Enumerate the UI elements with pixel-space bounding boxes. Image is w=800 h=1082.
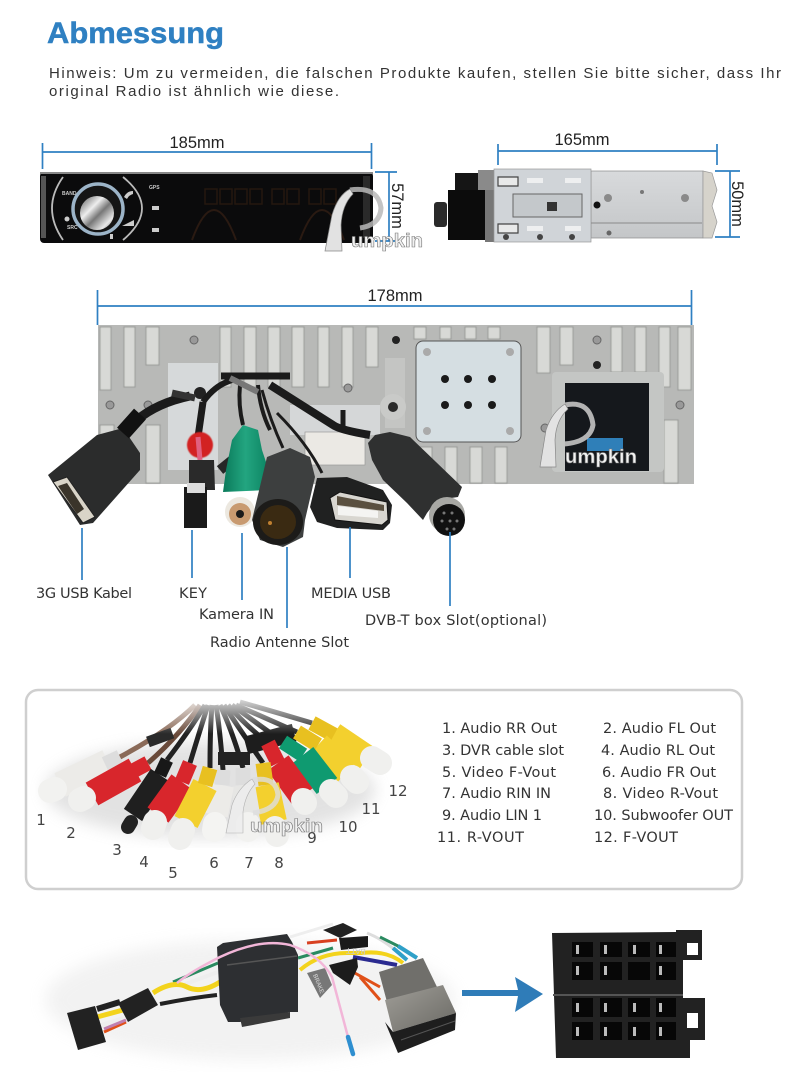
watermark rear: umpkin bbox=[565, 447, 637, 468]
radio front panel bbox=[40, 172, 373, 243]
connector leader lines bbox=[82, 527, 450, 628]
connector labels: Radio Antenne Slot bbox=[210, 635, 349, 651]
RCA plug fan bbox=[45, 692, 380, 838]
connector labels: 3G USB Kabel bbox=[36, 586, 132, 602]
connector: 3G USB bbox=[48, 414, 140, 525]
title: Abmessung bbox=[47, 17, 224, 50]
dimension: 50mm: 50mm bbox=[728, 181, 746, 227]
connector: green RCA (Kamera IN) bbox=[223, 425, 268, 527]
plug legend: 7. Audio RIN IN bbox=[442, 786, 551, 802]
plug 7 bbox=[243, 768, 248, 830]
dimension: 165mm: 165mm bbox=[554, 131, 610, 149]
connector labels bbox=[36, 586, 547, 651]
square mounting plate bbox=[416, 341, 521, 442]
plug 12 bbox=[312, 723, 380, 763]
plug 10 bbox=[283, 742, 336, 796]
plug numbers: 5 bbox=[168, 864, 178, 882]
tag: BATT: BATT bbox=[346, 946, 366, 956]
panel: RCA outputs bbox=[26, 690, 742, 889]
plug legend: 1. Audio RR Out bbox=[442, 721, 557, 737]
connector labels: Kamera IN bbox=[199, 607, 274, 623]
plug numbers: 4 bbox=[139, 853, 149, 871]
dimension: 50mm bbox=[715, 171, 746, 237]
watermark: umpkin bbox=[351, 231, 423, 252]
connector: KEY bbox=[184, 432, 215, 528]
plug legend: 11. R-VOUT bbox=[437, 830, 524, 846]
radio front panel: BAND bbox=[62, 191, 77, 197]
wiring harness bbox=[45, 923, 456, 1060]
dimension: 178mm bbox=[97, 287, 692, 325]
connector labels: MEDIA USB bbox=[311, 586, 391, 602]
tag: BATT bbox=[323, 923, 368, 956]
watermark fan: umpkin bbox=[250, 816, 323, 836]
arrow bbox=[462, 977, 543, 1012]
plug legend: 10. Subwoofer OUT bbox=[594, 808, 733, 824]
plug 11 bbox=[297, 732, 357, 782]
watermark rear bbox=[540, 404, 637, 468]
connector labels: DVB-T box Slot(optional) bbox=[365, 613, 547, 629]
plug numbers: 12 bbox=[388, 782, 408, 800]
plug numbers bbox=[36, 782, 408, 882]
dimension: 165mm bbox=[498, 131, 717, 165]
plug 1 bbox=[50, 757, 120, 791]
radio side view bbox=[434, 169, 717, 242]
dimension: 178mm: 178mm bbox=[367, 287, 423, 305]
plug numbers: 8 bbox=[274, 854, 284, 872]
plug legend: 12. F-VOUT bbox=[594, 830, 678, 846]
plug legend: 4. Audio RL Out bbox=[601, 743, 715, 759]
cables on rear bbox=[137, 376, 370, 473]
plug numbers: 1 bbox=[36, 811, 46, 829]
notice text bbox=[49, 65, 781, 100]
plug numbers: 6 bbox=[209, 854, 219, 872]
plug legend: 5. Video F-Vout bbox=[442, 765, 556, 781]
plug numbers: 9 bbox=[307, 829, 317, 847]
radio front panel: SRC bbox=[67, 225, 78, 231]
plug numbers: 3 bbox=[112, 841, 122, 859]
connector: Radio Antenne bbox=[252, 448, 315, 547]
plug 9 bbox=[268, 743, 305, 803]
plug 8 bbox=[263, 763, 277, 835]
plug numbers: 7 bbox=[244, 854, 254, 872]
connector: DVB-T bbox=[368, 432, 465, 536]
plug 5 bbox=[180, 768, 210, 838]
plug legend: 9. Audio LIN 1 bbox=[442, 808, 542, 824]
plug legend: 3. DVR cable slot bbox=[442, 743, 564, 759]
dimension: 185mm: 185mm bbox=[169, 134, 225, 152]
plug 6 bbox=[214, 770, 223, 830]
blue wire tip bbox=[348, 1037, 353, 1054]
radio front panel: GPS bbox=[149, 185, 160, 191]
watermark fan bbox=[226, 779, 323, 836]
dimension: 185mm bbox=[42, 134, 372, 169]
plug legend: 8. Video R-Vout bbox=[603, 786, 718, 802]
notice text: original Radio ist ähnlich wie diese. bbox=[49, 83, 339, 100]
ISO connector bbox=[552, 930, 705, 1058]
plug 2 bbox=[80, 763, 148, 800]
tag: BRAKE bbox=[307, 968, 332, 998]
connector labels: KEY bbox=[179, 586, 207, 602]
plug 4 bbox=[153, 763, 190, 828]
watermark bbox=[325, 189, 423, 252]
dimension: 57mm bbox=[375, 172, 406, 241]
plug numbers: 2 bbox=[66, 824, 76, 842]
notice text: Hinweis: Um zu vermeiden, die falschen Produkte kaufen, stellen Sie bitte sicher, dass Ihr bbox=[49, 65, 781, 82]
plug legend bbox=[437, 721, 733, 846]
tag: BRAKE: BRAKE bbox=[311, 974, 324, 995]
pink wire bbox=[177, 943, 348, 1037]
plug numbers: 10 bbox=[338, 818, 358, 836]
connector: MEDIA USB bbox=[310, 477, 392, 530]
plug legend: 2. Audio FL Out bbox=[603, 721, 716, 737]
plug numbers: 11 bbox=[361, 800, 381, 818]
plug 3 bbox=[128, 760, 167, 827]
dimension: 57mm: 57mm bbox=[388, 183, 406, 229]
radio rear panel bbox=[98, 325, 694, 484]
plug legend: 6. Audio FR Out bbox=[602, 765, 716, 781]
